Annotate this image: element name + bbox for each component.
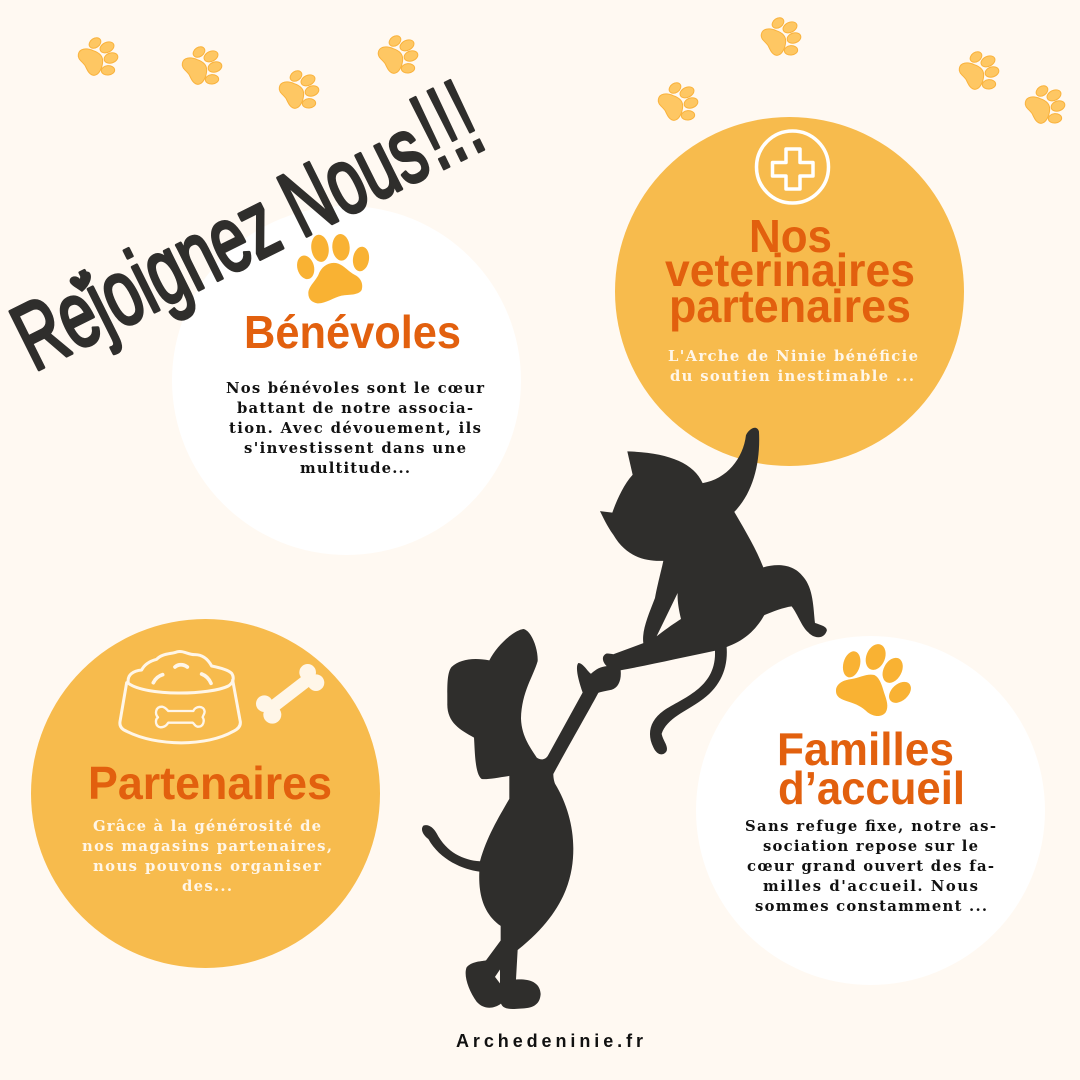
text block: Familles d'accueil: milles d'accueil. Nous: [763, 878, 978, 895]
title: Rejoignez Nous!!!: Rejoignez Nous: [0, 96, 443, 390]
text block: Partenaires: [82, 818, 332, 895]
footer: website: Archedeninie.fr: [456, 1031, 643, 1051]
small paw print 6: [658, 81, 699, 121]
heading: vétérinaires: partenaires: [669, 280, 911, 332]
text block: Partenaires: des...: [182, 878, 232, 895]
small paw print 3: [279, 69, 320, 109]
small paw print 1: [78, 36, 119, 76]
heading: Bénévoles: Bénévoles: [244, 306, 461, 358]
text block: vétérinaires: [668, 348, 918, 385]
panel: Partenaires: [31, 619, 380, 968]
panel: vétérinaires: [615, 117, 964, 466]
text block: Partenaires: Grâce à la générosité de: [93, 818, 321, 835]
title: Rejoignez Nous!!!: !!!: [394, 56, 501, 194]
text block: vétérinaires: L'Arche de Ninie bénéficie: [668, 348, 918, 365]
text block: Familles d'accueil: sommes constamment ...: [755, 898, 987, 915]
small paw print 7: [959, 50, 1000, 90]
small paw print 5: [761, 16, 802, 56]
panel: Bénévoles: [172, 206, 521, 555]
text block: Bénévoles: Nos bénévoles sont le cœur: [226, 380, 484, 397]
text block: Familles d'accueil: Sans refuge fixe, notre as-: [745, 818, 996, 835]
heading: Familles d'accueil: d’accueil: [778, 762, 965, 814]
illustration: dog and cat silhouettes: [422, 428, 827, 1009]
heading: Familles d'accueil: Familles: [777, 723, 954, 775]
text block: Bénévoles: battant de notre associa-: [237, 400, 473, 417]
title: Rejoignez Nous!!!: [0, 56, 501, 390]
heading: vétérinaires: Nos: [749, 210, 832, 262]
text block: Partenaires: nos magasins partenaires,: [82, 838, 332, 855]
icon: dog bowl: [120, 652, 240, 743]
text block: Bénévoles: s'investissent dans une: [244, 440, 466, 457]
heading: vétérinaires: veterinaires: [665, 244, 915, 296]
heading: Familles d'accueil: [777, 723, 965, 814]
panel: Familles d'accueil: [696, 636, 1045, 985]
icon: paw: [295, 233, 371, 303]
small paw print 2: [182, 45, 223, 85]
heading: Partenaires: Partenaires: [88, 757, 332, 809]
heading: vétérinaires: [665, 210, 915, 332]
icon: heart accent: [70, 271, 91, 292]
text block: Bénévoles: [226, 380, 484, 477]
icon: bone: [256, 664, 324, 724]
icon: paw: [836, 641, 915, 716]
text block: Familles d'accueil: cœur grand ouvert des fa-: [747, 858, 994, 875]
small paw print 8: [1025, 84, 1066, 124]
text block: Partenaires: nous pouvons organiser: [93, 858, 321, 875]
icon: medical cross: [756, 131, 828, 203]
small paw print 4: [378, 34, 419, 74]
text block: vétérinaires: du soutien inestimable ...: [670, 368, 914, 385]
text block: Familles d'accueil: sociation repose sur le: [763, 838, 978, 855]
text block: Bénévoles: multitude...: [300, 460, 410, 477]
text block: Bénévoles: tion. Avec dévouement, ils: [229, 420, 481, 437]
text block: Familles d'accueil: [745, 818, 996, 915]
